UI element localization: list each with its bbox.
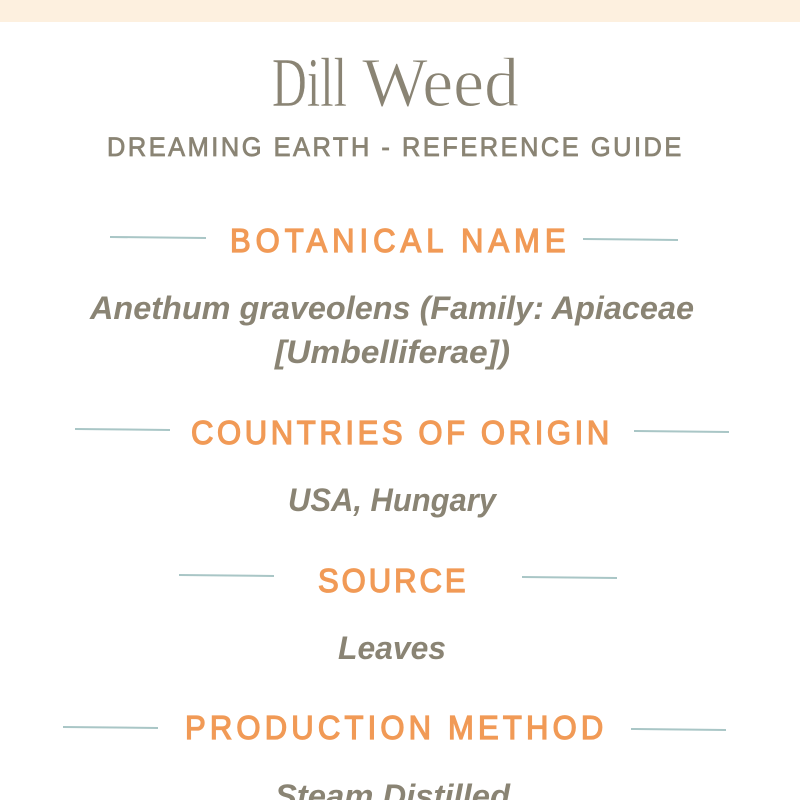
right rule [583,239,678,240]
left rule [110,237,206,238]
section: production method [63,709,726,800]
botanical name value: Anethum graveolens (Family: Apiaceae [89,290,694,326]
botanical name value [89,290,694,370]
section: countries of origin [75,414,729,518]
section: botanical name [89,222,694,370]
section: source [179,562,617,666]
botanical name value: [Umbelliferae]) [274,334,510,370]
left rule [75,429,170,430]
title: Weed [362,45,519,122]
source value: Leaves [338,630,446,666]
right rule [522,577,617,578]
subtitle: DREAMING EARTH - REFERENCE GUIDE [107,131,681,162]
title [272,45,519,122]
countries value: USA, Hungary [288,482,498,518]
heading: countries of origin: COUNTRIES OF ORIGIN [191,414,609,451]
left rule [63,727,158,728]
heading: source: SOURCE [318,562,466,599]
top cream band [0,0,800,22]
right rule [634,431,729,432]
right rule [631,729,726,730]
title: Dill [272,45,347,122]
heading: botanical name: BOTANICAL NAME [230,222,566,259]
left rule [179,575,274,576]
heading: production method: PRODUCTION METHOD [185,709,603,746]
